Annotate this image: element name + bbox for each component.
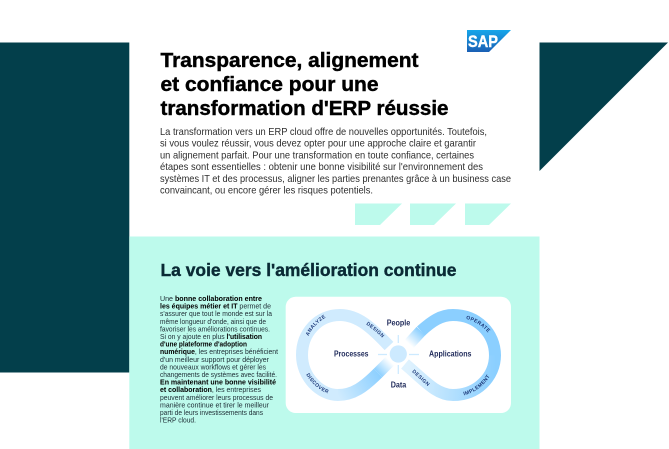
body text column: parti de leurs investissements dans (160, 408, 263, 417)
infinity loop: right segment (405, 315, 495, 395)
body text column (160, 294, 278, 425)
intro text block: La transformation vers un ERP cloud offre de nouvelles opportunités. Toutefois, (160, 127, 487, 138)
decorative mint chevrons (355, 204, 511, 225)
diagram labels: Processes (334, 349, 369, 358)
diagram labels: Data (391, 380, 407, 389)
body text column: et collaboration, les entreprises (160, 385, 261, 394)
heading: La voie vers l'amélioration continue (160, 260, 457, 280)
loop labels (306, 314, 490, 396)
body text column: Une bonne collaboration entre (160, 294, 262, 303)
infinity loop: left segment (302, 315, 390, 395)
title: transformation d'ERP réussie (160, 97, 448, 120)
title: et confiance pour une (160, 73, 378, 96)
logo: SAP: SAP (468, 32, 498, 51)
body text column: En maintenant une bonne visibilité (160, 378, 276, 387)
intro text block: étapes sont essentielles : obtenir une bonne visibilité sur l'environnement des (160, 162, 483, 173)
loop labels: DESIGN (412, 370, 430, 386)
body text column: Si on y ajoute en plus l'utilisation (160, 332, 262, 341)
right dark triangle (540, 42, 668, 171)
panel: infinity diagram (286, 296, 511, 413)
body text column: les équipes métier et IT permet de (160, 302, 271, 311)
intro text block: si vous voulez réussir, vous devez opter pour une approche claire et garantir (160, 139, 476, 150)
body text column: numérique, les entreprises bénéficient (160, 347, 278, 356)
loop labels: DESIGN (366, 322, 384, 338)
intro text block: convaincant, ou encore gérer les risques potentiels. (160, 186, 373, 196)
body text column: manière continue et tirer le meilleur (160, 400, 270, 409)
loop labels: IMPLEMENT (463, 374, 490, 396)
left dark panel (0, 42, 129, 372)
panel: continuous improvement (129, 236, 540, 449)
loop labels: OPERATE (466, 316, 490, 332)
intro text block: systèmes IT et des processus, aligner les parties prenantes grâce à un business case (160, 174, 511, 185)
body text column: d'une plateforme d'adoption (160, 340, 247, 349)
body text column: d'un meilleur support pour déployer (160, 355, 270, 364)
diagram labels: People (387, 318, 411, 328)
central hub with rays (378, 335, 419, 374)
diagram labels (334, 318, 472, 389)
body text column: l'ERP cloud. (160, 416, 196, 425)
logo: SAP (467, 30, 511, 52)
intro text block: un alignement parfait. Pour une transformation en toute confiance, certaines (160, 150, 474, 161)
body text column: changements de systèmes avec facilité. (160, 370, 277, 379)
body text column: favoriser les améliorations continues. (160, 324, 270, 333)
title (160, 49, 448, 120)
diagram labels: Applications (429, 349, 472, 358)
title: Transparence, alignement (160, 49, 419, 72)
loop labels: ANALYZE (306, 314, 326, 336)
body text column: même longueur d'onde, ainsi que de (160, 317, 266, 326)
body text column: peuvent améliorer leurs processus de (160, 393, 273, 402)
body text column: s'assurer que tout le monde est sur la (160, 309, 273, 318)
loop labels: DISCOVER (306, 373, 328, 394)
body text column: de nouveaux workflows et gérer les (160, 362, 266, 371)
intro text block (160, 127, 511, 196)
